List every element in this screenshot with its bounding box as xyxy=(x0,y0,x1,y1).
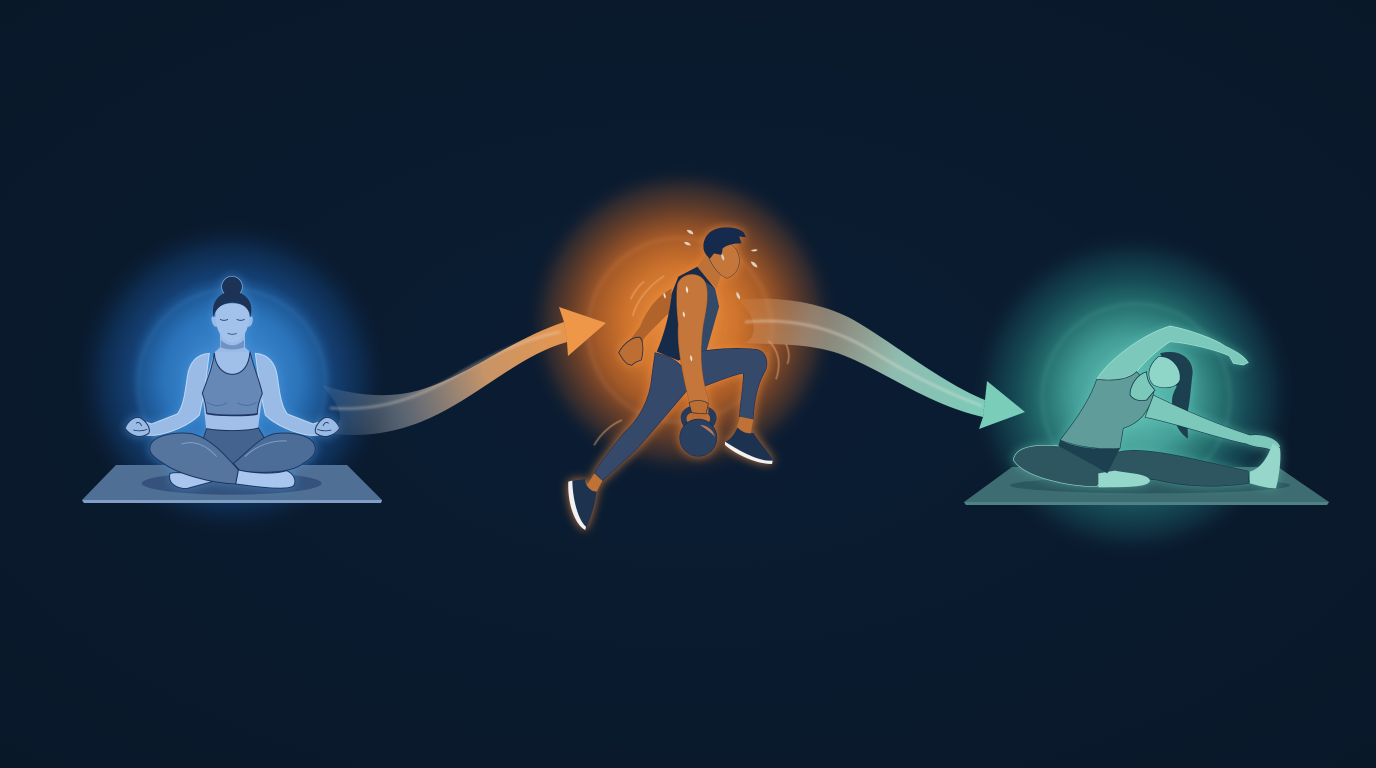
figure: man lifting kettlebell xyxy=(568,227,789,530)
waistband xyxy=(1058,440,1120,473)
mat: meditation xyxy=(82,465,382,503)
overhead arm xyxy=(1097,326,1248,380)
mat: stretching xyxy=(964,467,1329,505)
toes of stretched foot xyxy=(1250,443,1280,488)
tank top xyxy=(657,267,719,361)
tucked foot xyxy=(1098,471,1150,487)
head xyxy=(708,241,739,278)
back arm xyxy=(627,288,672,352)
hair xyxy=(1160,352,1193,439)
orange aura xyxy=(524,164,840,480)
reaching arm xyxy=(1145,395,1281,450)
hair xyxy=(703,227,746,259)
extended leg xyxy=(1107,450,1249,486)
torso skin xyxy=(213,332,252,353)
flow arrow: effort to recovery xyxy=(738,299,1025,429)
teal aura xyxy=(967,230,1297,560)
arrow head xyxy=(979,381,1025,429)
back hand xyxy=(619,337,643,365)
neck xyxy=(697,253,723,288)
front leg xyxy=(680,348,767,419)
head xyxy=(211,317,253,327)
face xyxy=(1149,357,1180,388)
sweat drops xyxy=(684,230,758,299)
flow arrow: calm to effort xyxy=(322,307,606,435)
blue aura xyxy=(72,218,392,538)
crop top xyxy=(202,352,262,415)
front arm xyxy=(677,274,708,413)
arrow head xyxy=(559,307,606,356)
front shoe xyxy=(725,427,773,462)
shoulder xyxy=(1130,372,1155,401)
right arm xyxy=(255,353,326,435)
rear leg xyxy=(594,353,689,481)
figure: meditating woman xyxy=(125,276,340,495)
leggings xyxy=(200,428,267,464)
figure: woman in side stretch xyxy=(1010,326,1290,493)
tank xyxy=(1060,372,1154,449)
kettlebell xyxy=(681,405,717,430)
rear shoe xyxy=(568,479,597,529)
back leg xyxy=(1013,445,1110,487)
left arm xyxy=(139,353,209,435)
ankles xyxy=(737,417,753,433)
motion lines xyxy=(594,276,789,445)
